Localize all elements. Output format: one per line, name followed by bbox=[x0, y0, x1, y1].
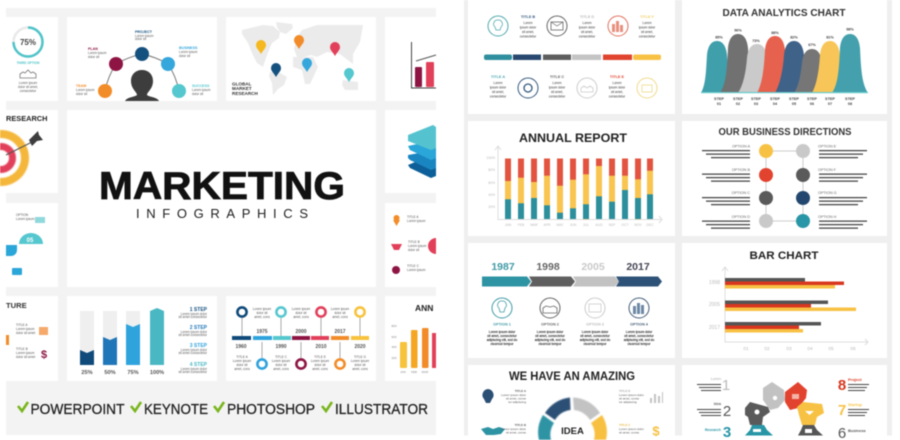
panel: annual report chart bbox=[468, 121, 675, 236]
panel: year timeline: OPTION 4 bbox=[630, 322, 649, 326]
panel: main marketing title: MARKETING bbox=[99, 165, 345, 208]
panel: isometric bars: 100% bbox=[150, 370, 164, 376]
panel: bar chart: 05 bbox=[828, 346, 834, 352]
panel: numbered gear bbox=[682, 365, 887, 440]
panel: numbered gear: Startup bbox=[848, 402, 863, 407]
panel: colour timeline: amet, cons bbox=[332, 315, 348, 319]
panel: amazing idea donut: sit amet, conse bbox=[619, 430, 640, 434]
panel: arc with head: Lorem ipsum bbox=[135, 34, 154, 38]
panel: amazing idea donut: tur adipiscing bbox=[619, 400, 637, 404]
panel: annual report chart: JAN bbox=[505, 223, 512, 227]
panel: amazing idea donut: sit amet, conse bbox=[506, 396, 526, 400]
panel: colour timeline: dolor sit bbox=[354, 363, 366, 367]
panel: title timeline with icons: TITLE F bbox=[640, 15, 655, 19]
panel: isometric bars: 1 STEP bbox=[190, 307, 208, 313]
panel: partial annual chart: 400 bbox=[391, 345, 397, 349]
panel: our business directions: OPTION C bbox=[732, 191, 750, 195]
panel: numbered gear: 1 bbox=[722, 377, 730, 394]
panel: arc with head: Lorem ipsum bbox=[179, 50, 198, 54]
panel: year timeline: 2017 bbox=[626, 261, 650, 273]
panel: arc with head: Lorem ipsum bbox=[192, 88, 211, 92]
panel: year timeline: eiusmod tempor bbox=[539, 342, 562, 346]
panel: bar chart: 06 bbox=[850, 346, 856, 352]
panel: arc with head: BUSINESS bbox=[179, 46, 198, 50]
panel: isometric bars bbox=[67, 296, 217, 381]
panel: partial annual chart: 600 bbox=[391, 335, 397, 339]
panel: data analytics chart: STEP bbox=[807, 97, 817, 101]
panel: colour timeline: amet, cons bbox=[254, 315, 270, 319]
panel: bar chart: 01 bbox=[743, 346, 749, 352]
panel: annual report chart: 60% bbox=[488, 181, 495, 185]
panel: world map research: RESEARCH bbox=[232, 91, 258, 96]
panel: colour timeline: 2000 bbox=[295, 329, 307, 335]
panel: arc with head: TEAM bbox=[76, 84, 86, 88]
panel: colour timeline: Lorem ipsum bbox=[311, 359, 330, 363]
panel: isometric bars: 50% bbox=[104, 370, 116, 376]
panel: colour timeline bbox=[226, 296, 376, 381]
icon: bars bbox=[650, 392, 663, 403]
panel: amazing idea donut: TITLE C bbox=[619, 423, 631, 427]
panel: amazing idea donut: tur adipiscing bbox=[508, 400, 526, 404]
panel: partial annual chart: 200 bbox=[391, 356, 397, 360]
panel: amazing idea donut: TITLE B bbox=[515, 423, 527, 427]
panel: arc with head bbox=[67, 17, 217, 101]
panel: amazing idea donut: $ bbox=[652, 424, 660, 438]
panel: isometric bars: sit amet consectetur bbox=[178, 351, 208, 355]
panel: year timeline: adipiscing elit, sed do bbox=[535, 338, 565, 342]
panel: options with icons: Lorem ipsum bbox=[407, 268, 426, 272]
panel: annual report chart: 100% bbox=[486, 156, 495, 160]
panel: data analytics chart: 08 bbox=[848, 102, 852, 106]
panel: process wave: 05 bbox=[27, 238, 34, 244]
panel: colour timeline: TITLE A bbox=[236, 355, 249, 359]
icon: bulb bbox=[482, 389, 494, 403]
panel: data analytics chart: STEP bbox=[770, 97, 780, 101]
band: software compatibility: ILLUSTRATOR bbox=[335, 401, 428, 418]
check marks bbox=[18, 402, 332, 411]
panel: title timeline with icons: sit amet, bbox=[581, 30, 593, 34]
panel: year timeline: Lorem ipsum dolor bbox=[626, 330, 653, 334]
panel: amazing idea donut: WE HAVE AN AMAZING bbox=[509, 371, 635, 383]
panel: title timeline with icons: ipsum dolor bbox=[579, 26, 596, 30]
panel: options with icons: dolor sit bbox=[408, 248, 419, 252]
panel: data analytics chart: 96% bbox=[734, 28, 742, 32]
panel: our business directions bbox=[682, 121, 887, 236]
gear segments bbox=[745, 382, 824, 436]
panel: colour timeline: 1990 bbox=[275, 344, 287, 350]
panel: donut 75 percent bbox=[6, 17, 58, 101]
panel: options with icons: TITLE B bbox=[408, 240, 420, 244]
panel: donut 75 percent: consectetur bbox=[20, 89, 37, 93]
panel: year timeline: sit amet, consectetur bbox=[624, 334, 655, 338]
icon: handshake bbox=[481, 427, 505, 435]
panel: colour timeline: dolor sit bbox=[256, 311, 268, 315]
panel: data analytics chart: 81% bbox=[826, 36, 834, 40]
panel: year timeline: OPTION 2 bbox=[541, 322, 559, 326]
panel: colour timeline: amet, cons bbox=[273, 367, 289, 371]
panel: data analytics chart: DATA ANALYTICS CHART bbox=[722, 7, 846, 19]
panel: isometric bars: 75% bbox=[127, 370, 139, 376]
panel: year timeline: 1987 bbox=[491, 261, 515, 273]
panel: title timeline with icons: ipsum dolor bbox=[549, 86, 566, 90]
panel: colour timeline: dolor sit bbox=[314, 363, 326, 367]
panel: data analytics chart: 01 bbox=[717, 102, 721, 106]
panel: our business directions: OPTION E bbox=[818, 144, 837, 148]
panel: main marketing title: INFOGRAPHICS bbox=[136, 206, 308, 221]
panel: year timeline bbox=[468, 243, 675, 358]
panel: year timeline: eiusmod tempor bbox=[584, 342, 607, 346]
panel: our business directions: OPTION H bbox=[818, 215, 837, 219]
panel: amazing idea donut: TITLE D bbox=[619, 389, 631, 393]
panel: partial annual chart: 800 bbox=[391, 324, 397, 328]
panel: colour timeline: Lorem ipsum bbox=[331, 307, 350, 311]
panel: partial annual chart: FEB bbox=[411, 370, 417, 374]
panel: title timeline with icons: ipsum dolor bbox=[490, 86, 507, 90]
panel: year timeline: sit amet, consectetur bbox=[535, 334, 566, 338]
panel: numbered gear: Research bbox=[705, 428, 721, 432]
panel: layered blocks bbox=[385, 110, 436, 193]
panel: data analytics chart: 07 bbox=[828, 102, 832, 106]
panel: data analytics chart: STEP bbox=[825, 97, 835, 101]
panel: structure: dolor sit amet bbox=[16, 355, 35, 359]
panel: arc with head: SUCCESS bbox=[192, 84, 210, 88]
panel: data analytics chart bbox=[682, 0, 887, 114]
panel: bar chart: 03 bbox=[786, 346, 792, 352]
panel: colour timeline: TITLE G bbox=[354, 355, 367, 359]
panel: colour timeline: Lorem ipsum bbox=[272, 359, 291, 363]
panel: world map research: GLOBAL bbox=[232, 82, 252, 86]
panel: colour timeline: amet, cons bbox=[293, 315, 309, 319]
band: software compatibility: PHOTOSHOP bbox=[227, 401, 315, 418]
panel: title timeline with icons: TITLE B bbox=[521, 15, 535, 19]
panel: partial annual chart: MAR bbox=[422, 370, 429, 374]
panel: annual report chart: AUG bbox=[595, 223, 603, 227]
panel: title timeline with icons: Lorem bbox=[582, 21, 592, 25]
panel: annual report chart: 40% bbox=[488, 193, 495, 197]
panel: our business directions: OPTION G bbox=[818, 191, 837, 195]
panel: annual report chart: FEB bbox=[518, 223, 525, 227]
panel: colour timeline: TITLE E bbox=[314, 355, 326, 359]
panel: title timeline with icons: Lorem bbox=[493, 81, 503, 85]
panel: arc with head: dolor sit bbox=[88, 55, 99, 59]
panel: colour timeline: amet, cons bbox=[234, 367, 250, 371]
icon: head with bulb bbox=[125, 70, 159, 101]
panel: arc with head: PLAN bbox=[88, 47, 98, 51]
panel: structure: dolor sit amet bbox=[16, 331, 35, 335]
panel: data analytics chart: 04 bbox=[773, 102, 778, 106]
panel: year timeline: adipiscing elit, sed do bbox=[624, 338, 654, 342]
panel: isometric bars: 25% bbox=[81, 370, 93, 376]
panel: year timeline: adipiscing elit, sed do bbox=[580, 338, 610, 342]
panel: colour timeline: 1975 bbox=[256, 329, 268, 335]
panel: data analytics chart: 03 bbox=[754, 102, 758, 106]
panel: isometric bars: sit amet consectetur bbox=[178, 333, 208, 337]
left collage background bbox=[6, 8, 436, 435]
panel: our business directions: OPTION A bbox=[732, 144, 750, 148]
panel: data analytics chart: STEP bbox=[714, 97, 724, 101]
panel: title timeline with icons: TITLE C bbox=[550, 75, 564, 79]
panel: donut 75 percent: 75% bbox=[20, 38, 36, 47]
panel: year timeline: OPTION 3 bbox=[586, 322, 604, 326]
panel: title timeline with icons: consectetur bbox=[639, 34, 656, 38]
panel: title timeline with icons: Lorem bbox=[552, 81, 562, 85]
panel: annual report chart: 20% bbox=[488, 205, 495, 209]
panel: process wave: Lorem ipsum bbox=[16, 217, 35, 221]
panel: isometric bars: Lorem ipsum dolor bbox=[181, 367, 208, 371]
panel: title timeline with icons: TITLE E bbox=[610, 75, 625, 79]
panel: colour timeline: 2017 bbox=[334, 329, 346, 335]
panel: bar chart: 02 bbox=[764, 346, 770, 352]
panel: annual report chart: JUN bbox=[570, 223, 577, 227]
panel: annual report chart: 80% bbox=[488, 168, 495, 172]
panel: research target: RESEARCH bbox=[6, 114, 47, 123]
panel: year timeline: sit amet, consectetur bbox=[487, 334, 518, 338]
panel: title timeline with icons: sit amet, bbox=[522, 30, 534, 34]
panel: year timeline: 1998 bbox=[536, 261, 560, 273]
panel: our business directions: OPTION D bbox=[732, 215, 750, 219]
panel: title timeline with icons: Lorem bbox=[523, 21, 533, 25]
panel: isometric bars: Lorem ipsum dolor bbox=[181, 330, 208, 334]
panel: amazing idea donut: Lorem ipsum dolor bbox=[619, 393, 644, 397]
panel: colour timeline: Lorem ipsum bbox=[292, 307, 311, 311]
panel: title timeline with icons: Lorem bbox=[642, 21, 652, 25]
panel: title timeline with icons: consectetur bbox=[520, 34, 537, 38]
panel: partial annual chart: JAN bbox=[400, 370, 406, 374]
panel: numbered gear: 7 bbox=[838, 402, 846, 419]
panel: numbered gear: Business bbox=[848, 428, 867, 433]
panel: colour timeline: dolor sit bbox=[275, 363, 287, 367]
panel: world map research bbox=[226, 17, 376, 101]
panel: arc with head: dolor sit bbox=[179, 54, 190, 58]
panel: options with icons: TITLE A bbox=[407, 215, 419, 219]
panel: year timeline: adipiscing elit, sed do bbox=[487, 338, 517, 342]
panel: year timeline: Lorem ipsum dolor bbox=[537, 330, 564, 334]
panel: title timeline with icons: consectetur bbox=[579, 34, 596, 38]
panel: research target bbox=[0, 110, 58, 193]
map pins bbox=[256, 35, 354, 82]
panel: title timeline with icons: sit amet, bbox=[611, 90, 623, 94]
panel: structure: TITLE A bbox=[16, 323, 28, 327]
panel: numbered gear: Lorem bbox=[711, 377, 721, 381]
band: software compatibility bbox=[18, 401, 428, 418]
panel: year timeline: OPTION 1 bbox=[493, 322, 511, 326]
panel: annual report chart: DEC bbox=[646, 223, 654, 227]
panel: data analytics chart: STEP bbox=[733, 97, 743, 101]
panel: colour timeline: 2010 bbox=[315, 344, 327, 350]
panel: partial bar chart bbox=[385, 17, 436, 101]
panel: colour timeline: dolor sit bbox=[236, 363, 248, 367]
panel: colour timeline: TITLE C bbox=[275, 355, 288, 359]
panel: title timeline with icons: consectetur bbox=[609, 94, 626, 98]
panel: data analytics chart: STEP bbox=[789, 97, 799, 101]
panel: title timeline with icons: TITLE D bbox=[580, 15, 594, 19]
panel: structure: $ bbox=[41, 349, 47, 361]
panel: isometric bars: sit amet consectetur bbox=[178, 370, 208, 374]
panel: annual report chart: JUL bbox=[583, 223, 589, 227]
panel: data analytics chart: STEP bbox=[845, 97, 855, 101]
panel: colour timeline: dolor sit bbox=[334, 311, 346, 315]
panel: isometric bars: 3 STEP bbox=[190, 343, 208, 349]
panel: colour timeline: Lorem ipsum bbox=[233, 359, 252, 363]
panel: title timeline with icons: sit amet, bbox=[492, 90, 504, 94]
panel: amazing idea donut: sit amet, conse bbox=[619, 396, 640, 400]
panel: our business directions: OPTION F bbox=[818, 168, 837, 172]
panel: title timeline with icons: ipsum dolor bbox=[609, 86, 626, 90]
panel: options with icons bbox=[385, 203, 436, 287]
panel: amazing idea donut: Lorem ipsum dolor bbox=[501, 427, 526, 431]
panel: annual report chart: APR bbox=[544, 223, 551, 227]
panel: colour timeline: Lorem ipsum bbox=[253, 307, 272, 311]
panel: bar chart: BAR CHART bbox=[750, 250, 819, 262]
panel: data analytics chart: 85% bbox=[715, 36, 723, 40]
panel: process wave bbox=[6, 203, 58, 287]
panel: title timeline with icons: sit amet, bbox=[641, 30, 653, 34]
right collage background bbox=[464, 0, 892, 436]
panel: year timeline: 2005 bbox=[581, 261, 605, 273]
panel: bar chart: 04 bbox=[807, 346, 813, 352]
panel: numbered gear: Project bbox=[848, 377, 862, 382]
panel: isometric bars: sit amet consectetur bbox=[178, 315, 208, 319]
panel: year timeline: Lorem ipsum dolor bbox=[582, 330, 609, 334]
panel: arc with head: dolor sit bbox=[135, 37, 146, 41]
panel: bar chart: 1998 bbox=[709, 280, 720, 286]
panel: annual report chart: SEP bbox=[609, 223, 616, 227]
panel: amazing idea donut: Lorem ipsum dolor bbox=[501, 393, 526, 397]
panel: title timeline with icons: ipsum dolor bbox=[520, 26, 537, 30]
panel: structure: Lorem ipsum bbox=[16, 351, 35, 355]
panel: numbered gear: Idea bbox=[714, 402, 722, 406]
panel: data analytics chart: 06 bbox=[810, 102, 814, 106]
panel: year timeline: eiusmod tempor bbox=[491, 342, 514, 346]
panel: annual report chart: MAY bbox=[556, 223, 564, 227]
panel: options with icons: TITLE C bbox=[407, 264, 420, 268]
panel: bar chart: 2017 bbox=[709, 325, 720, 331]
panel: donut 75 percent: Lorem ipsum bbox=[19, 81, 38, 85]
panel: partial annual chart: ANN bbox=[415, 303, 433, 313]
panel: colour timeline: 1960 bbox=[235, 344, 247, 350]
panel: data analytics chart: 82% bbox=[790, 36, 798, 40]
panel: structure bbox=[6, 296, 58, 381]
panel: annual report chart: MAR bbox=[530, 223, 538, 227]
panel: data analytics chart: 73% bbox=[752, 39, 760, 43]
panel: data analytics chart: 98% bbox=[846, 28, 854, 32]
panel: our business directions: OUR BUSINESS DIRECTIONS bbox=[718, 127, 852, 138]
panel: arc with head: dolor sit bbox=[76, 92, 87, 96]
panel: colour timeline: dolor sit bbox=[295, 311, 307, 315]
panel: arc with head: dolor sit bbox=[192, 92, 203, 96]
panel: data analytics chart: 67% bbox=[808, 43, 816, 47]
panel: title timeline with icons: consectetur bbox=[549, 94, 566, 98]
panel: data analytics chart: 02 bbox=[736, 102, 740, 106]
panel: colour timeline: Lorem ipsum bbox=[351, 359, 370, 363]
panel: bar chart: 2005 bbox=[709, 302, 720, 308]
panel: numbered gear: 2 bbox=[723, 403, 731, 420]
panel: arc with head: PROJECT bbox=[135, 30, 153, 34]
panel: world map research: MARKET bbox=[232, 86, 252, 91]
panel: title timeline with icons: ipsum dolor bbox=[639, 26, 656, 30]
panel: year timeline: sit amet, consectetur bbox=[580, 334, 611, 338]
panel: our business directions: OPTION B bbox=[732, 168, 750, 172]
panel: title timeline with icons bbox=[468, 0, 675, 114]
band: software compatibility: KEYNOTE bbox=[144, 401, 208, 418]
panel: title timeline with icons: consectetur bbox=[490, 94, 507, 98]
panel: annual report chart: OCT bbox=[621, 223, 629, 227]
panel: isometric bars: 4 STEP bbox=[190, 362, 208, 368]
panel: annual report chart: ANNUAL REPORT bbox=[519, 131, 628, 145]
panel: arc with head: Lorem ipsum bbox=[88, 51, 107, 55]
band: software compatibility: POWERPOINT bbox=[30, 401, 124, 418]
panel: colour timeline: amet, cons bbox=[312, 367, 328, 371]
panel: isometric bars: 2 STEP bbox=[190, 325, 208, 331]
panel: title timeline with icons: Lorem bbox=[612, 81, 622, 85]
panel: isometric bars: Lorem ipsum dolor bbox=[181, 312, 208, 316]
panel: colour timeline: amet, cons bbox=[352, 367, 368, 371]
panel: process wave: OPTION bbox=[16, 213, 29, 217]
panel: bar chart bbox=[682, 243, 887, 358]
panel: structure: Lorem ipsum bbox=[16, 327, 35, 331]
panel: data analytics chart: 05 bbox=[792, 102, 796, 106]
panel: options with icons: Lorem ipsum bbox=[408, 244, 427, 248]
panel: data analytics chart: STEP bbox=[751, 97, 761, 101]
panel: amazing idea donut: TITLE A bbox=[515, 389, 527, 393]
panel: structure: TITLE B bbox=[16, 347, 28, 351]
panel: amazing idea donut: IDEA bbox=[561, 426, 584, 437]
panel: annual report chart: NOV bbox=[634, 223, 642, 227]
panel: donut 75 percent: dolor sit amet, bbox=[18, 85, 38, 89]
panel: partial annual chart bbox=[385, 296, 436, 381]
panel: isometric bars: Lorem ipsum dolor bbox=[181, 348, 208, 352]
panel: numbered gear: 8 bbox=[838, 377, 846, 394]
panel: title timeline with icons: sit amet, bbox=[551, 90, 563, 94]
panel: options with icons: Lorem ipsum bbox=[407, 219, 426, 223]
world map bbox=[242, 22, 363, 95]
panel: amazing idea donut: Lorem ipsum dolor bbox=[619, 427, 644, 431]
panel: year timeline: Lorem ipsum dolor bbox=[489, 330, 516, 334]
panel: colour timeline: 2020 bbox=[354, 344, 366, 350]
panel: year timeline: eiusmod tempor bbox=[628, 342, 651, 346]
panel: arc with head: Lorem ipsum bbox=[76, 88, 95, 92]
panel: amazing idea donut: sit amet, conse bbox=[506, 430, 526, 434]
panel: amazing idea donut bbox=[468, 365, 675, 440]
panel: structure: TURE bbox=[6, 301, 27, 310]
panel: data analytics chart: 88% bbox=[771, 31, 779, 35]
panel: title timeline with icons: TITLE A bbox=[491, 75, 505, 79]
panel: donut 75 percent: THIRD OPTION bbox=[17, 61, 40, 65]
panel: main marketing title bbox=[67, 110, 376, 287]
